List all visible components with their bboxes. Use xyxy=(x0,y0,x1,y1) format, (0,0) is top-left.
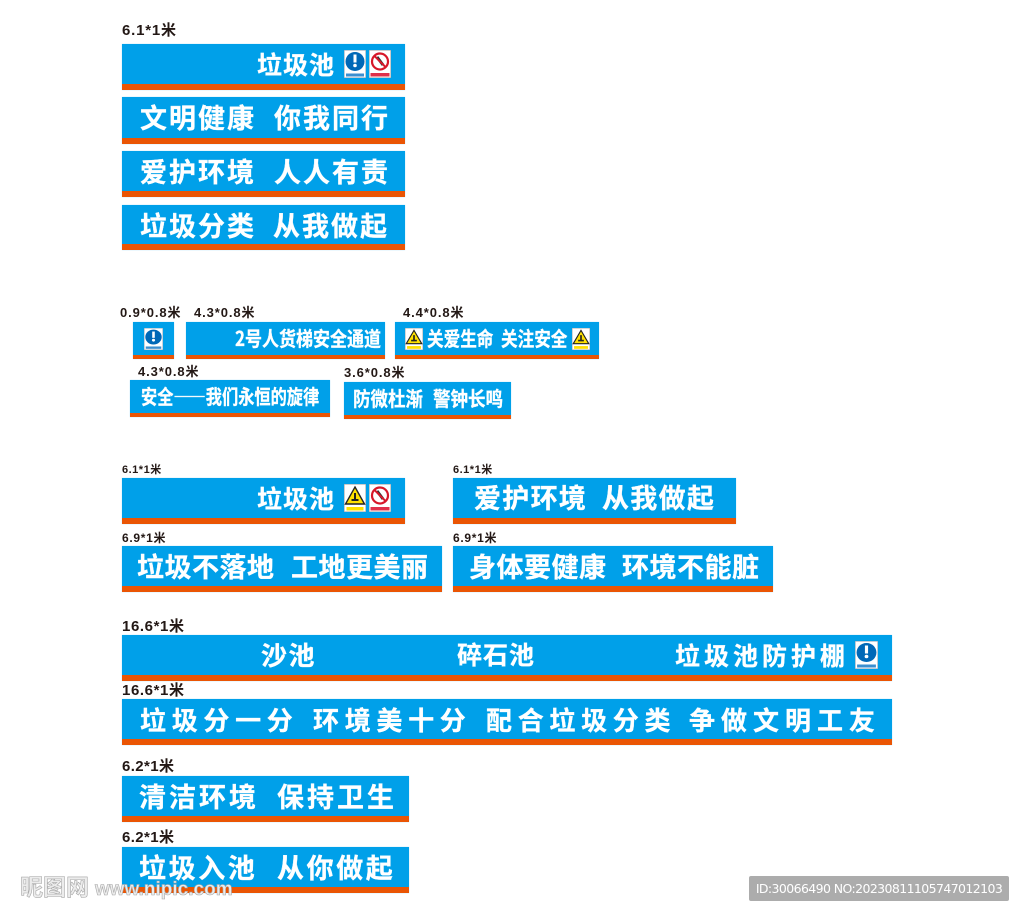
label: 6.9*1米 left: 6.9*1米 xyxy=(122,531,166,545)
sign: 清洁环境 保持卫生: 保持卫生 xyxy=(277,776,397,815)
sign: 清洁环境 保持卫生 xyxy=(122,776,409,822)
sign: 爱护环境 从我做起: 从我做起 xyxy=(602,477,715,516)
label: 6.1*1米 top: 6.1*1米 xyxy=(122,22,177,39)
sign: 沙池 碎石池 垃圾池防护棚 xyxy=(122,635,892,681)
sign: 身体要健康 环境不能脏: 环境不能脏 xyxy=(622,546,760,585)
label: 6.1*1米 right: 6.1*1米 xyxy=(453,464,493,476)
label: 4.3*0.8米: 4.3*0.8米 xyxy=(194,305,255,320)
sign: 垃圾不落地 工地更美丽: 垃圾不落地 xyxy=(137,546,274,585)
sign: 垃圾入池 从你做起: 从你做起 xyxy=(277,847,395,886)
sign: 爱护环境 人人有责: 人人有责 xyxy=(274,151,390,190)
sign: 清洁环境 保持卫生: 清洁环境 xyxy=(139,776,259,815)
label: 16.6*1米 second: 16.6*1米 xyxy=(122,682,185,699)
label: 16.6*1米 first: 16.6*1米 xyxy=(122,618,185,635)
label: 4.4*0.8米: 4.4*0.8米 xyxy=(403,305,464,320)
sign: 防微杜渐 警钟长鸣: 警钟长鸣 xyxy=(433,383,503,412)
sign: 垃圾分一分 环境美十分 配合垃圾分类 争做文明工友: 配合垃圾分类 xyxy=(486,701,676,738)
sign: 沙池 碎石池 垃圾池防护棚: 垃圾池防护棚 xyxy=(675,637,849,673)
sign: 垃圾分一分 环境美十分 配合垃圾分类 争做文明工友: 垃圾分一分 xyxy=(140,701,299,738)
sign: 2号人货梯安全通道 xyxy=(186,322,385,359)
label: 6.2*1米 first: 6.2*1米 xyxy=(122,758,174,775)
sign: 爱护环境 从我做起 xyxy=(453,478,736,524)
sign: 文明健康 你我同行: 你我同行 xyxy=(274,97,390,136)
sign: 垃圾入池 从你做起: 垃圾入池 xyxy=(139,847,257,886)
label: 6.1*1米 left: 6.1*1米 xyxy=(122,464,162,476)
sign: 垃圾分类 从我做起 xyxy=(122,205,405,250)
watermark: nipic logo: 昵图网 www.nipic.com xyxy=(20,868,233,902)
sign: small icon sign xyxy=(133,322,174,359)
sign: 防微杜渐 警钟长鸣: 防微杜渐 xyxy=(353,383,423,412)
sign: 安全——我们永恒的旋律: 安全——我们永恒的旋律 xyxy=(141,381,319,410)
sign: 沙池 碎石池 垃圾池防护棚: 沙池 xyxy=(261,636,316,673)
sign: 2号人货梯安全通道: 2号人货梯安全通道 xyxy=(235,323,381,352)
sign: 垃圾分类 从我做起: 垃圾分类 xyxy=(140,205,256,244)
sign: 身体要健康 环境不能脏 xyxy=(453,546,773,592)
label: 3.6*0.8米: 3.6*0.8米 xyxy=(344,365,405,380)
sign: 文明健康 你我同行: 文明健康 xyxy=(140,97,256,136)
sign: 垃圾池 with icons xyxy=(122,44,405,90)
sign: 垃圾池 with warning icons: 垃圾池 xyxy=(257,480,335,516)
sign: 爱护环境 人人有责: 爱护环境 xyxy=(140,151,256,190)
sign: 文明健康 你我同行 xyxy=(122,97,405,144)
label: 6.9*1米 right: 6.9*1米 xyxy=(453,531,497,545)
watermark: ID badge xyxy=(749,876,1009,901)
sign: 关爱生命 关注安全: 关爱生命 xyxy=(427,323,493,352)
sign: 关爱生命 关注安全: 关注安全 xyxy=(501,323,567,352)
sign: 安全——我们永恒的旋律 xyxy=(130,380,330,417)
sign: 垃圾分一分 环境美十分 配合垃圾分类 争做文明工友: 争做文明工友 xyxy=(689,701,881,738)
sign: 垃圾入池 从你做起 xyxy=(122,847,409,893)
sign: 沙池 碎石池 垃圾池防护棚: 碎石池 xyxy=(457,636,535,672)
sign: 垃圾分类 从我做起: 从我做起 xyxy=(273,205,389,244)
label: 0.9*0.8米: 0.9*0.8米 xyxy=(120,305,181,320)
sign: 垃圾池 with icons: 垃圾池 xyxy=(257,46,335,82)
sign: 垃圾不落地 工地更美丽: 工地更美丽 xyxy=(291,546,428,585)
sign: 垃圾分一分 环境美十分 配合垃圾分类 争做文明工友 xyxy=(122,699,892,745)
sign: 爱护环境 人人有责 xyxy=(122,151,405,197)
sign: 垃圾不落地 工地更美丽 xyxy=(122,546,442,592)
sign: 防微杜渐 警钟长鸣 xyxy=(344,382,511,419)
sign: 身体要健康 环境不能脏: 身体要健康 xyxy=(469,546,606,585)
sign: 垃圾池 with warning icons xyxy=(122,478,405,524)
watermark: ID badge: ID:30066490 NO:20230811105747012103 xyxy=(756,881,1002,896)
label: 6.2*1米 second: 6.2*1米 xyxy=(122,829,174,846)
sign: 爱护环境 从我做起: 爱护环境 xyxy=(474,477,587,516)
sign: 垃圾分一分 环境美十分 配合垃圾分类 争做文明工友: 环境美十分 xyxy=(313,701,472,738)
sign: 关爱生命 关注安全 xyxy=(395,322,599,359)
label: 4.3*0.8米 second: 4.3*0.8米 xyxy=(138,364,199,379)
